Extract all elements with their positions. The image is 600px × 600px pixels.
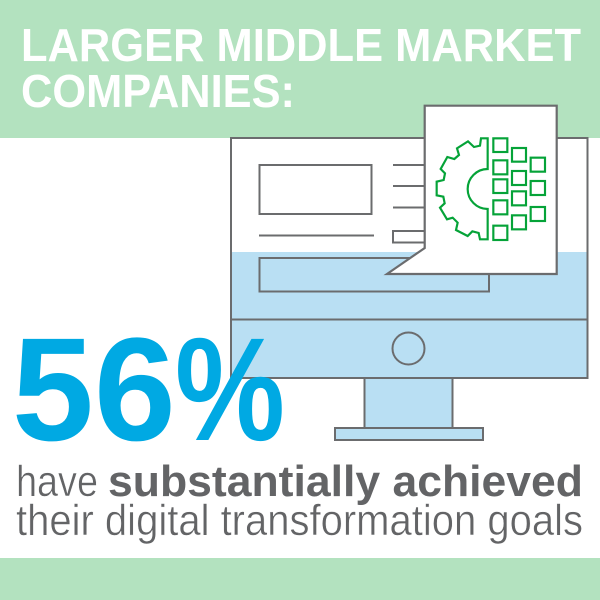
- top green banner: [0, 0, 600, 138]
- icon: half gear with pixel squares: [437, 138, 545, 240]
- title: COMPANIES:: [21, 65, 295, 117]
- title: LARGER MIDDLE MARKET: [21, 19, 581, 71]
- caption text: substantially achieved: [108, 457, 583, 506]
- pixel squares: [493, 138, 545, 240]
- title: [21, 19, 581, 117]
- big statistic 56%: 6: [94, 308, 176, 472]
- half gear: [437, 138, 488, 239]
- big statistic 56%: [12, 308, 285, 472]
- icon: desktop monitor: [231, 138, 588, 440]
- speech bubble callout: [387, 106, 557, 274]
- big statistic 56%: %: [175, 308, 285, 472]
- caption text: [16, 457, 583, 545]
- big statistic 56%: 5: [12, 308, 94, 472]
- bottom green band: [0, 558, 600, 600]
- caption text: have: [16, 457, 98, 506]
